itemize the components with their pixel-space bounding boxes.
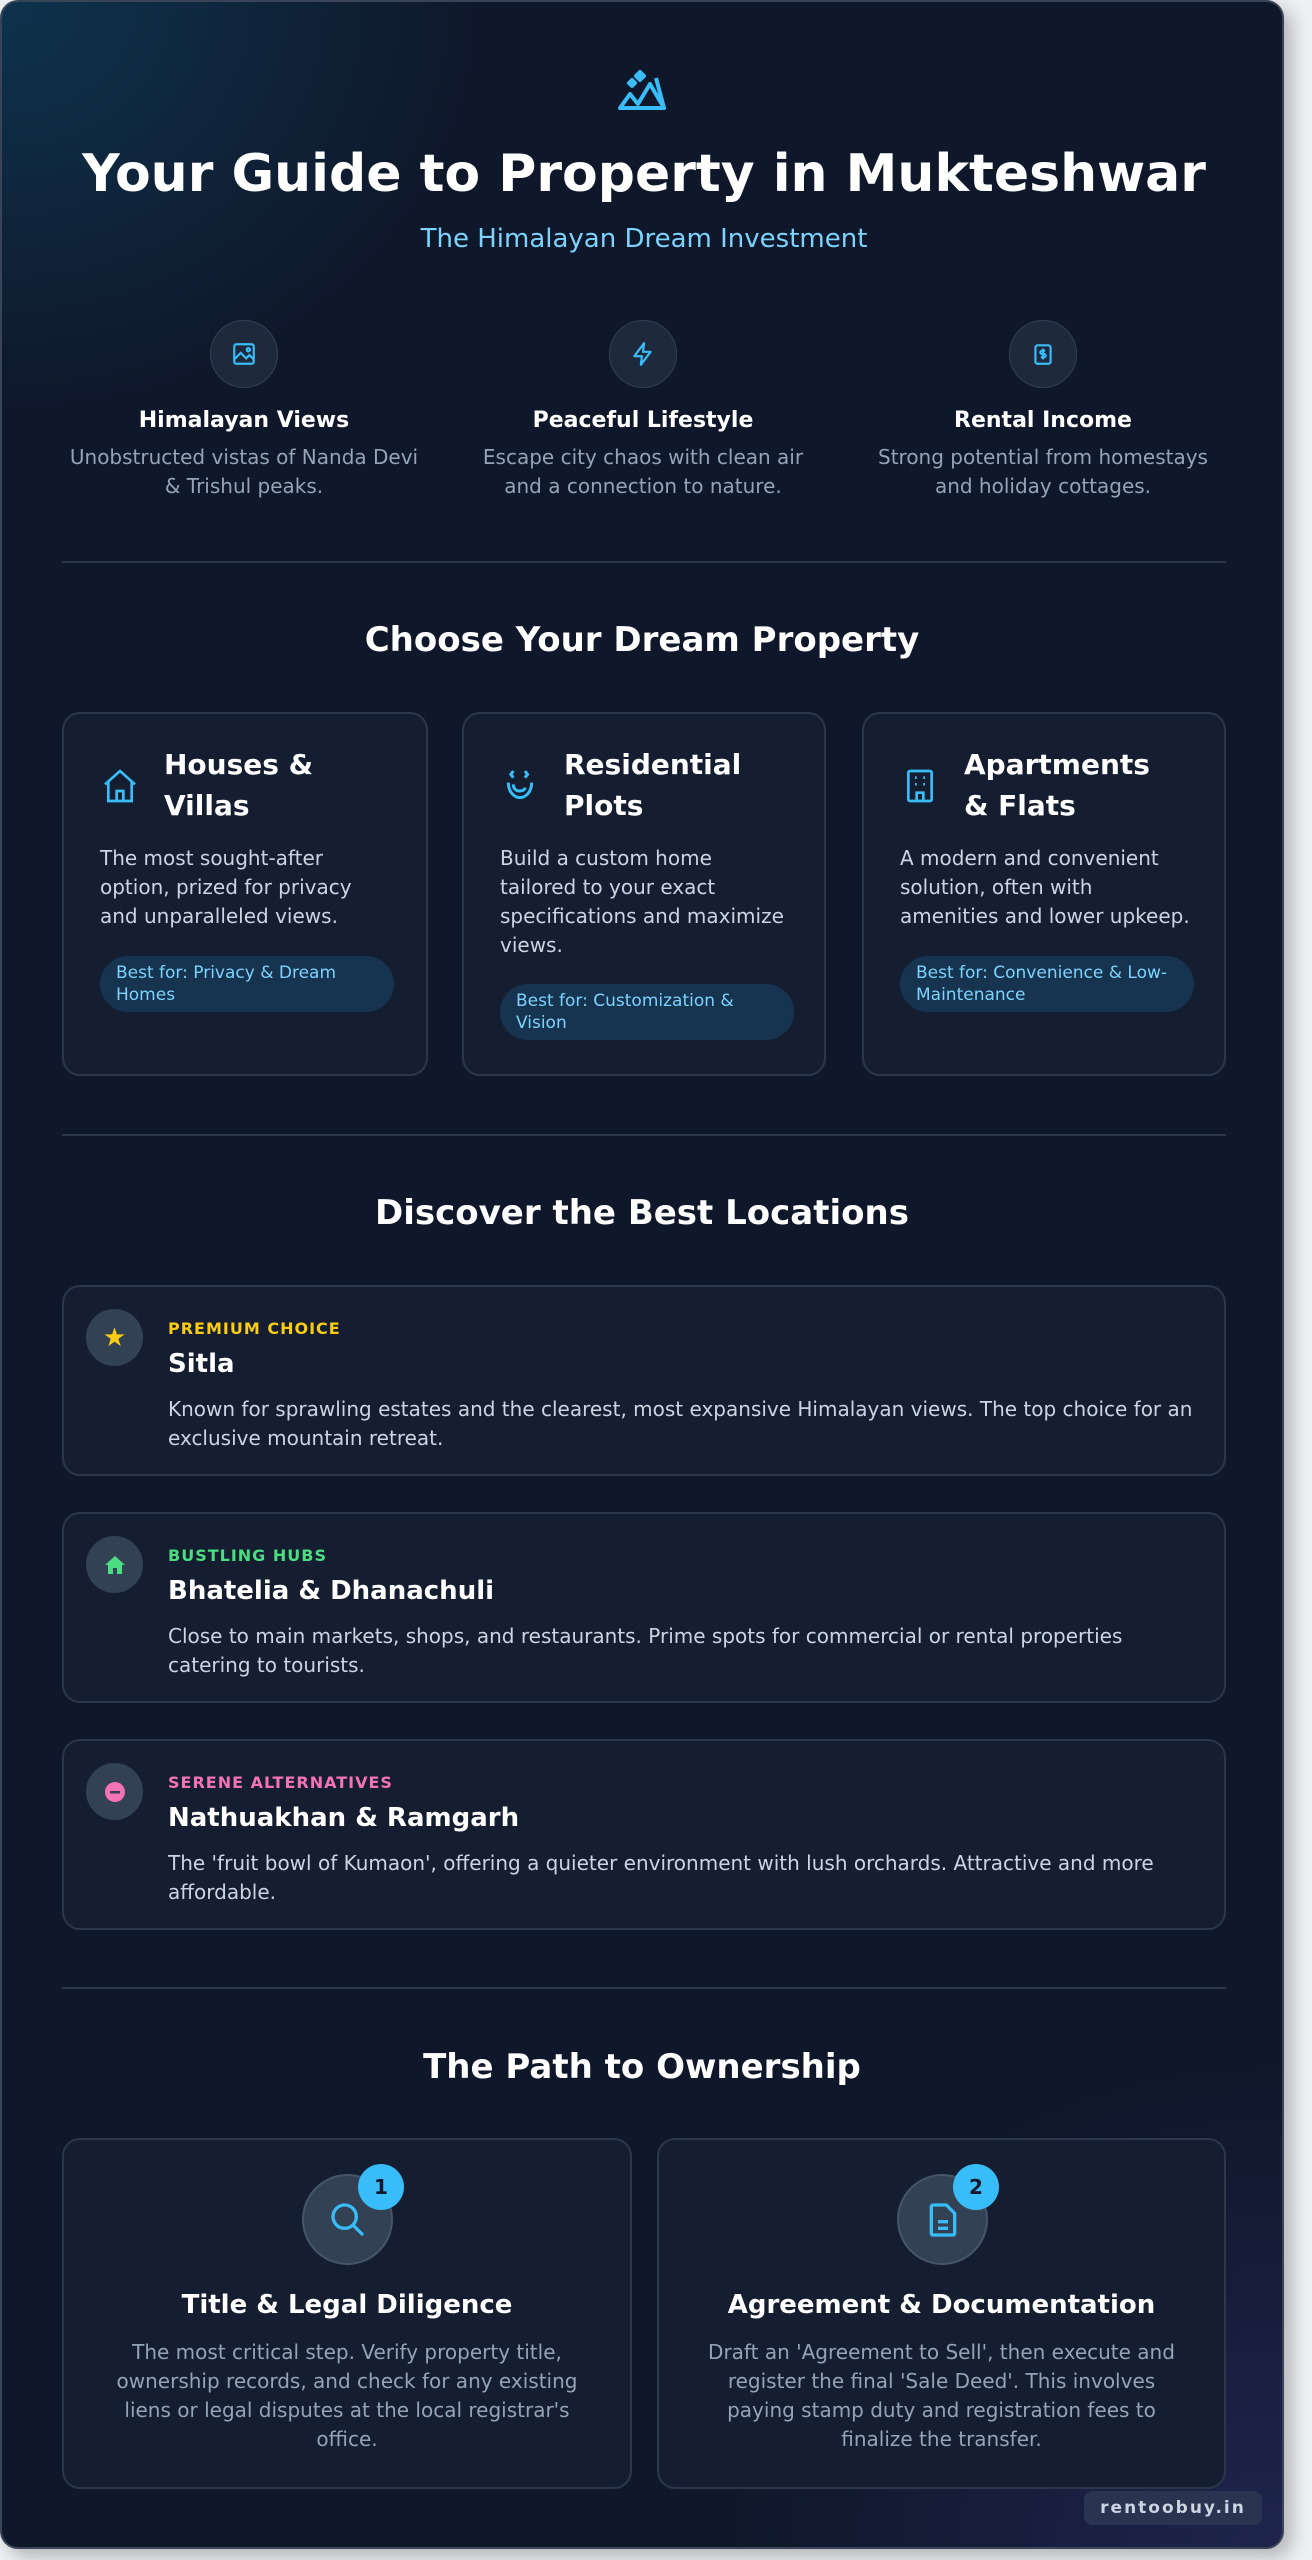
location: Bhatelia: Close to main markets, shops, and restaurants. Prime spots for commercial or rental properties catering to tourists. xyxy=(168,1624,1122,1677)
panel: apartments: Best for: Convenience & Low-Maintenance xyxy=(916,963,1167,1005)
feature: Rental Income xyxy=(878,320,1208,498)
icon: image xyxy=(210,320,278,388)
icon+title: Houses & xyxy=(164,748,313,781)
feature: Peaceful Lifestyle: Peaceful Lifestyle xyxy=(533,408,753,433)
feature: Rental Income: and holiday cottages. xyxy=(935,474,1151,498)
heading: The Path to Ownership: The Path to Ownership xyxy=(423,2047,861,2087)
location: Nathuakhan: SERENE ALTERNATIVES xyxy=(168,1773,393,1792)
feature: Peaceful Lifestyle: Escape city chaos with clean air xyxy=(483,445,803,469)
location: Nathuakhan: The 'fruit bowl of Kumaon', offering a quieter environment with lush orchards. Attractive and more affordable. xyxy=(168,1851,1154,1904)
panel: apartments: amenities and lower upkeep. xyxy=(900,904,1190,928)
heading: Discover the Best Locations: Discover the Best Locations xyxy=(375,1193,909,1233)
panel: plots: specifications and maximize xyxy=(500,904,784,928)
feature: Peaceful Lifestyle xyxy=(483,320,804,498)
icon: bolt xyxy=(609,320,677,388)
icon: document xyxy=(897,2174,988,2265)
step 1: 1 xyxy=(374,2175,388,2199)
panel: apartments: solution, often with xyxy=(900,875,1092,899)
feature: Rental Income: Rental Income xyxy=(954,408,1132,433)
step 2: 2 xyxy=(969,2175,983,2199)
location: Sitla: PREMIUM CHOICE xyxy=(168,1319,341,1338)
icon+title: Plots xyxy=(564,789,643,822)
step 2 xyxy=(657,2138,1226,2489)
brand tag xyxy=(1084,2491,1262,2525)
panel: houses: option, prized for privacy xyxy=(100,875,352,899)
icon+title: Apartments xyxy=(964,748,1150,781)
step 1: The most critical step. Verify property title, ownership records, and check for any existing liens or legal disputes at the local registrar's office. xyxy=(117,2340,577,2451)
panel: houses: The most sought-after xyxy=(100,846,323,870)
step 2: Agreement & Documentation xyxy=(728,2290,1155,2320)
feature: Peaceful Lifestyle: and a connection to nature. xyxy=(504,474,782,498)
feature: Himalayan Views xyxy=(70,320,418,498)
feature: Himalayan Views: Himalayan Views xyxy=(139,408,349,433)
feature: Rental Income: Strong potential from homestays xyxy=(878,445,1208,469)
location: Bhatelia: Bhatelia & Dhanachuli xyxy=(168,1576,494,1606)
panel: houses xyxy=(62,712,428,1076)
icon+title: & Flats xyxy=(964,789,1076,822)
location: Bhatelia xyxy=(62,1512,1226,1703)
panel: plots: tailored to your exact xyxy=(500,875,715,899)
icon+title: Residential xyxy=(564,748,741,781)
panel: plots: Best for: Customization & Vision xyxy=(516,991,734,1033)
icon: search xyxy=(302,2174,393,2265)
location: Bhatelia: BUSTLING HUBS xyxy=(168,1546,327,1565)
panel: apartments xyxy=(862,712,1226,1076)
location: Sitla: Sitla xyxy=(168,1349,235,1379)
feature: Himalayan Views: Unobstructed vistas of Nanda Devi xyxy=(70,445,418,469)
title: Your Guide to Property in Mukteshwar xyxy=(82,144,1206,204)
panel: plots: Build a custom home xyxy=(500,846,712,870)
icon+title: Villas xyxy=(164,789,250,822)
icon: mountains logo xyxy=(618,70,666,110)
panel: plots: views. xyxy=(500,933,563,957)
location: Sitla xyxy=(62,1285,1226,1476)
panel: houses: and unparalleled views. xyxy=(100,904,338,928)
icon+title xyxy=(104,748,313,822)
location: Nathuakhan xyxy=(62,1739,1226,1930)
feature: Himalayan Views: & Trishul peaks. xyxy=(165,474,323,498)
brand tag: rentoobuy.in xyxy=(1100,2498,1246,2518)
icon+title xyxy=(506,748,741,822)
step 1: Title & Legal Diligence xyxy=(182,2290,512,2320)
heading: Choose Your Dream Property: Choose Your Dream Property xyxy=(365,620,919,660)
icon+title xyxy=(907,748,1150,822)
step 2: Draft an 'Agreement to Sell', then execute and register the final 'Sale Deed'. This involves paying stamp duty and registration fees to finalize the transfer. xyxy=(708,2340,1175,2451)
location: Sitla: Known for sprawling estates and the clearest, most expansive Himalayan views. The top choice for an exclusive mountain retreat. xyxy=(168,1397,1192,1450)
icon: money xyxy=(1009,320,1077,388)
location: Nathuakhan: Nathuakhan & Ramgarh xyxy=(168,1803,519,1833)
panel: apartments: A modern and convenient xyxy=(900,846,1159,870)
panel: houses: Best for: Privacy & Dream Homes xyxy=(116,963,336,1005)
icon: star: ★ xyxy=(103,1322,126,1352)
subtitle: The Himalayan Dream Investment xyxy=(421,224,867,254)
panel: plots xyxy=(462,712,826,1076)
icon: home xyxy=(86,1536,143,1593)
step 1 xyxy=(62,2138,632,2489)
icon: minus circle xyxy=(86,1763,143,1820)
icon: star xyxy=(86,1309,143,1366)
